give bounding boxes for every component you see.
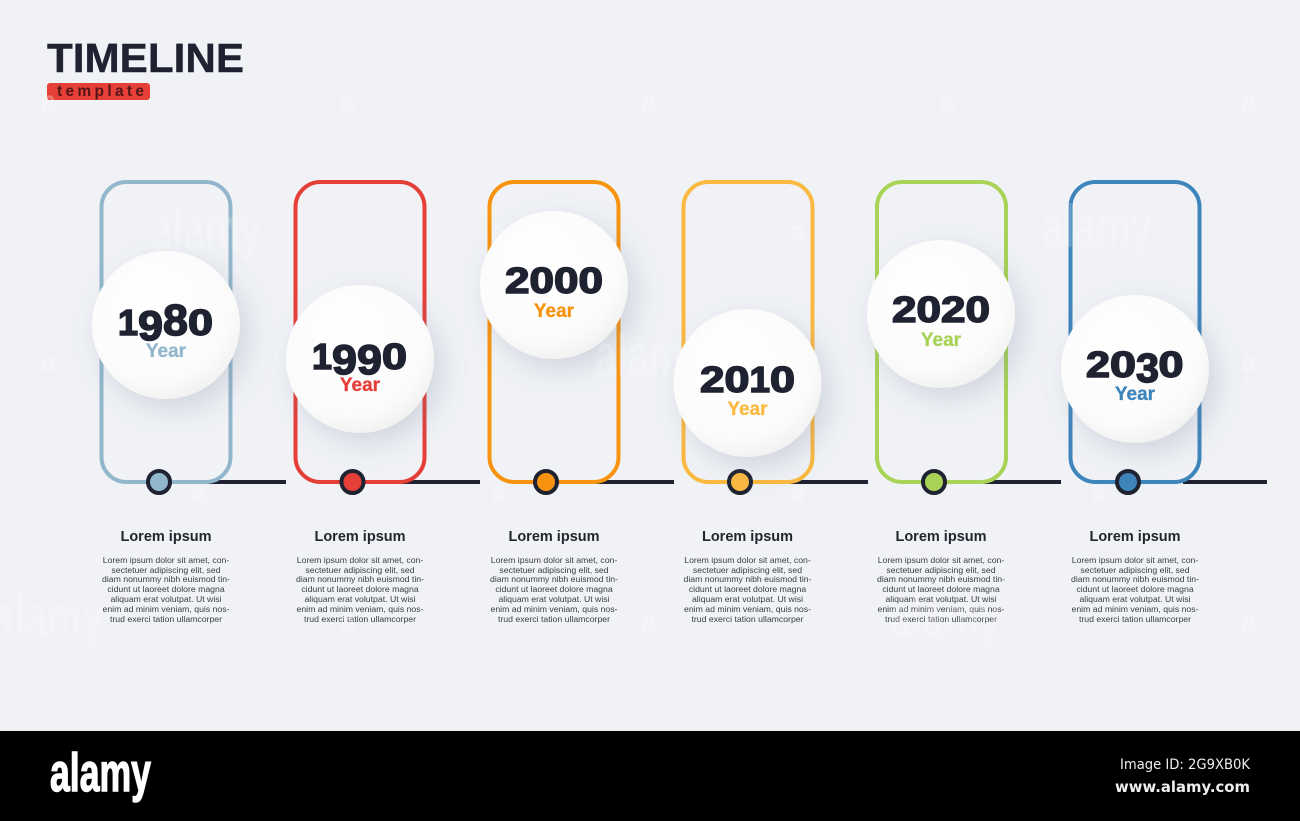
body 1990: cidunt ut laoreet dolore magna — [301, 584, 419, 594]
year 1990: 1 — [312, 336, 332, 377]
panel: 2020 — [867, 182, 1061, 624]
year 2020: 0 — [916, 289, 941, 330]
frame 1980 — [102, 182, 230, 482]
year 2020: 2 — [892, 289, 916, 330]
watermarks: alamy — [595, 322, 705, 389]
year 2030: 0 — [1158, 344, 1184, 385]
body 2030: trud exerci tation ullamcorper — [1079, 614, 1191, 624]
year 2010: 0 — [770, 359, 795, 400]
watermarks: a — [491, 216, 506, 247]
year 1990 — [312, 336, 407, 383]
body 2010 — [684, 555, 812, 624]
year 2010: 0 — [724, 359, 750, 400]
year 1980: 8 — [163, 296, 188, 345]
body 2020: Lorem ipsum dolor sit amet, con- — [878, 555, 1004, 565]
year 2000: 0 — [578, 260, 603, 301]
body 2010: cidunt ut laoreet dolore magna — [689, 584, 806, 594]
year 2000: 0 — [530, 260, 554, 301]
panel: 1980 — [92, 182, 286, 624]
frame 2030 — [1070, 182, 1200, 482]
watermarks: a — [191, 476, 206, 507]
year 2030: 3 — [1136, 345, 1159, 391]
body 2000: enim ad minim veniam, quis nos- — [491, 604, 618, 614]
year 1990: 0 — [382, 336, 407, 377]
body 1980: cidunt ut laoreet dolore magna — [107, 584, 225, 594]
year 1980: 1 — [118, 302, 138, 343]
watermarks: a — [790, 476, 805, 507]
year 2020: 2 — [941, 289, 966, 330]
body 2020 — [877, 555, 1005, 624]
watermarks: a — [41, 346, 56, 377]
heading 2030: Lorem ipsum — [1089, 529, 1181, 545]
subtitle badge: template — [57, 83, 144, 100]
body 1990: Lorem ipsum dolor sit amet, con- — [297, 555, 423, 565]
panel: 2030 — [1061, 182, 1267, 624]
body 2010: diam nonummy nibh euismod tin- — [684, 574, 812, 584]
label 2030: Year — [1115, 384, 1156, 405]
watermarks: a — [940, 85, 955, 116]
title — [47, 35, 244, 100]
watermarks: a — [641, 606, 656, 637]
body 2000 — [490, 555, 618, 624]
body 2000: diam nonummy nibh euismod tin- — [490, 574, 618, 584]
year 2010: 1 — [750, 359, 770, 400]
frame 2020 — [877, 182, 1006, 482]
body 2030: Lorem ipsum dolor sit amet, con- — [1072, 555, 1198, 565]
body 2020: diam nonummy nibh euismod tin- — [877, 574, 1005, 584]
body 1990: sectetuer adipiscing elit, sed — [305, 565, 415, 575]
marker 2030 — [1117, 471, 1139, 493]
watermarks: a — [1241, 85, 1256, 116]
year 2000: 0 — [554, 260, 578, 301]
body 2020: enim ad minim veniam, quis nos- — [878, 604, 1005, 614]
body 2010: Lorem ipsum dolor sit amet, con- — [684, 555, 811, 565]
body 1980: diam nonummy nibh euismod tin- — [102, 574, 230, 584]
watermarks: a — [340, 606, 355, 637]
connector 2010 — [790, 480, 868, 484]
connector 2000 — [596, 480, 674, 484]
heading 2020: Lorem ipsum — [895, 529, 987, 545]
watermarks: a — [641, 85, 656, 116]
body 2000: sectetuer adipiscing elit, sed — [499, 565, 609, 575]
disc 2020 — [867, 240, 1015, 388]
year 2020 — [892, 289, 990, 330]
label 1980: Year — [146, 341, 187, 362]
body 2030: cidunt ut laoreet dolore magna — [1076, 584, 1194, 594]
year 1990: 9 — [357, 336, 382, 383]
year 2000 — [505, 260, 603, 301]
body 2030 — [1071, 555, 1199, 624]
watermarks: a — [1241, 346, 1256, 377]
year 2010: 2 — [700, 359, 724, 400]
body 1980: Lorem ipsum dolor sit amet, con- — [103, 555, 229, 565]
body 1980: trud exerci tation ullamcorper — [110, 614, 222, 624]
body 1980: sectetuer adipiscing elit, sed — [111, 565, 221, 575]
connector 2020 — [984, 480, 1061, 484]
body 2000: trud exerci tation ullamcorper — [498, 614, 610, 624]
body 2030: aliquam erat volutpat. Ut wisi — [1079, 594, 1191, 604]
marker 2000 — [535, 471, 557, 493]
watermarks: a — [41, 85, 56, 116]
label 2020: Year — [921, 330, 962, 351]
body 2030: enim ad minim veniam, quis nos- — [1072, 604, 1199, 614]
body 2010: aliquam erat volutpat. Ut wisi — [692, 594, 803, 604]
label 2010: Year — [727, 399, 768, 420]
body 1980 — [102, 555, 230, 624]
body 2020: sectetuer adipiscing elit, sed — [886, 565, 996, 575]
year 2020: 0 — [966, 289, 990, 330]
marker 1980 — [148, 471, 170, 493]
disc 2030 — [1061, 295, 1209, 443]
year 2000: 2 — [505, 260, 530, 301]
body 2030: diam nonummy nibh euismod tin- — [1071, 574, 1199, 584]
body 1990: diam nonummy nibh euismod tin- — [296, 574, 424, 584]
frame 2010 — [684, 182, 812, 482]
marker 2020 — [923, 471, 945, 493]
body 1990 — [296, 555, 424, 624]
heading 2000: Lorem ipsum — [508, 529, 600, 545]
body 1980: enim ad minim veniam, quis nos- — [103, 604, 230, 614]
image id: Image ID: 2G9XB0K — [1120, 757, 1251, 773]
body 2010: sectetuer adipiscing elit, sed — [693, 565, 802, 575]
body 1990: enim ad minim veniam, quis nos- — [297, 604, 424, 614]
website: www.alamy.com — [1115, 778, 1250, 796]
disc 2010 — [674, 309, 822, 457]
connector 1980 — [208, 480, 286, 484]
body 2020: cidunt ut laoreet dolore magna — [882, 584, 1000, 594]
disc 1980 — [92, 251, 240, 399]
year 2030 — [1086, 344, 1184, 391]
label 2000: Year — [534, 301, 575, 322]
connector 1990 — [402, 480, 480, 484]
year 1980 — [118, 296, 213, 349]
frame 1990 — [296, 182, 424, 482]
watermarks: alamy — [1042, 193, 1152, 260]
title: TIMELINE — [47, 35, 244, 81]
disc 1990 — [286, 285, 434, 433]
watermarks: a — [1241, 606, 1256, 637]
marker 1990 — [342, 471, 364, 493]
year 2010 — [700, 359, 795, 400]
body 2010: trud exerci tation ullamcorper — [691, 614, 804, 624]
body 2010: enim ad minim veniam, quis nos- — [684, 604, 811, 614]
disc 2000 — [480, 211, 628, 359]
watermarks: a — [790, 216, 805, 247]
footer logo: alamy — [50, 743, 151, 803]
heading 2010: Lorem ipsum — [702, 529, 793, 545]
year 2030: 0 — [1110, 344, 1136, 385]
body 2020: trud exerci tation ullamcorper — [885, 614, 997, 624]
body 2000: aliquam erat volutpat. Ut wisi — [498, 594, 610, 604]
body 2000: cidunt ut laoreet dolore magna — [495, 584, 613, 594]
body 2000: Lorem ipsum dolor sit amet, con- — [491, 555, 617, 565]
year 2030: 2 — [1086, 344, 1110, 385]
body 2030: sectetuer adipiscing elit, sed — [1080, 565, 1190, 575]
footer bar — [0, 731, 1300, 821]
watermarks: alamy — [151, 196, 261, 263]
panel: 2000 — [480, 182, 674, 624]
heading 1990: Lorem ipsum — [314, 529, 406, 545]
watermarks: a — [1091, 476, 1106, 507]
watermarks: alamy — [890, 583, 1000, 650]
connector 2030 — [1183, 480, 1267, 484]
year 1980: 9 — [138, 302, 163, 349]
watermarks — [0, 85, 1256, 650]
frame 2000 — [490, 182, 618, 482]
body 2020: aliquam erat volutpat. Ut wisi — [885, 594, 997, 604]
marker 2010 — [729, 471, 751, 493]
watermarks: a — [491, 476, 506, 507]
body 1990: aliquam erat volutpat. Ut wisi — [304, 594, 416, 604]
label 1990: Year — [340, 375, 381, 396]
watermarks: a — [340, 85, 355, 116]
body 1980: aliquam erat volutpat. Ut wisi — [110, 594, 222, 604]
panel: 1990 — [286, 182, 480, 624]
year 1980: 0 — [188, 302, 213, 343]
body 1990: trud exerci tation ullamcorper — [304, 614, 416, 624]
panel: 2010 — [674, 182, 868, 624]
year 1990: 9 — [332, 336, 357, 383]
heading 1980: Lorem ipsum — [120, 529, 212, 545]
